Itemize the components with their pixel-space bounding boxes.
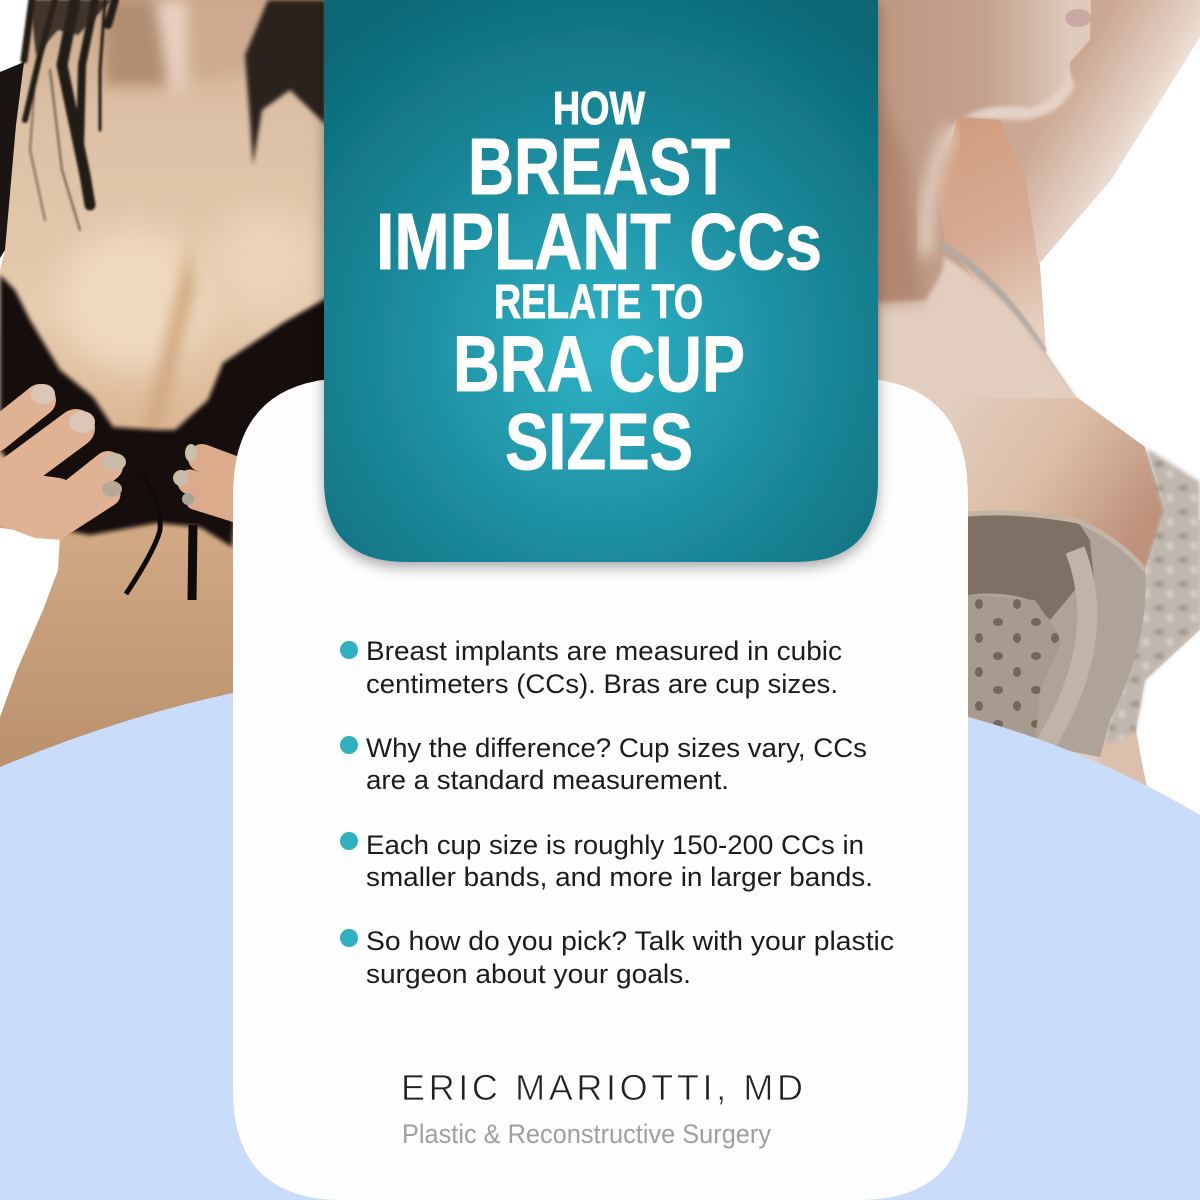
bullet list bbox=[340, 636, 894, 989]
hair top cluster bbox=[30, 0, 112, 55]
right hand bbox=[173, 444, 245, 518]
chin highlight bbox=[945, 70, 1075, 150]
bullet 3: Each cup size is roughly 150-200 CCs in bbox=[366, 830, 864, 860]
upper body bbox=[921, 398, 1165, 570]
lace seam band bbox=[1045, 550, 1087, 745]
hair left bbox=[24, 0, 115, 230]
blue wave background bbox=[0, 693, 1200, 1200]
neck highlight stripe bbox=[925, 128, 952, 255]
bullet 4: So how do you pick? Talk with your plastic bbox=[366, 926, 894, 956]
lace dotted zone bbox=[968, 595, 1062, 745]
chest highlight bbox=[60, 230, 210, 370]
hair right bbox=[245, 0, 326, 165]
neck shadow bbox=[878, 90, 925, 305]
lower skin bbox=[1100, 725, 1147, 790]
left lace cup bbox=[968, 512, 1146, 757]
lace upper dark zone bbox=[968, 515, 1095, 620]
title: BREAST bbox=[468, 122, 730, 211]
photo: right model bbox=[878, 0, 1200, 790]
neck shadow bbox=[105, 0, 170, 85]
neck highlight bbox=[155, 0, 190, 95]
neck and face bbox=[878, 0, 1200, 790]
torso bbox=[0, 0, 330, 780]
throat bbox=[938, 117, 1046, 353]
title: RELATE TO bbox=[494, 276, 703, 329]
lace trim bbox=[968, 513, 1145, 570]
bullet 3: smaller bands, and more in larger bands. bbox=[366, 862, 873, 892]
bullet 1: centimeters (CCs). Bras are cup sizes. bbox=[366, 669, 838, 699]
nails bbox=[185, 444, 197, 462]
bullet 4 bbox=[340, 926, 894, 989]
title: SIZES bbox=[505, 397, 693, 486]
raised arm bbox=[1000, 0, 1200, 265]
centre shading bbox=[145, 240, 194, 430]
logo: practice name bbox=[401, 1067, 803, 1149]
bullet 2: are a standard measurement. bbox=[366, 765, 729, 795]
bullet 1 bbox=[340, 636, 842, 699]
collar band bbox=[942, 245, 1044, 352]
right lace cup bbox=[1105, 447, 1200, 745]
nails bbox=[31, 384, 55, 404]
logo: practice name: ERIC MARIOTTI, MD bbox=[401, 1067, 803, 1108]
bullet 2 bbox=[340, 733, 867, 795]
bullet 1: Breast implants are measured in cubic bbox=[366, 636, 842, 666]
title: BRA CUP bbox=[453, 319, 745, 408]
panel: white content card bbox=[233, 378, 968, 1200]
lips bbox=[1065, 9, 1091, 27]
title: HOW bbox=[553, 82, 645, 134]
bullet 2: Why the difference? Cup sizes vary, CCs bbox=[366, 733, 867, 763]
bullet 4: surgeon about your goals. bbox=[366, 959, 691, 989]
strap bbox=[0, 62, 24, 258]
photo: left model bbox=[0, 0, 330, 780]
left hand bbox=[0, 384, 126, 540]
collar skin bbox=[878, 255, 1078, 420]
panel: teal title block bbox=[324, 0, 878, 562]
black lace garment bbox=[0, 275, 330, 547]
title bbox=[376, 82, 822, 486]
logo: practice name: Plastic & Reconstructive Surgery bbox=[402, 1119, 771, 1149]
bullet 3 bbox=[340, 830, 873, 892]
title: IMPLANT CCs bbox=[376, 197, 822, 286]
ribbon bbox=[124, 518, 198, 600]
